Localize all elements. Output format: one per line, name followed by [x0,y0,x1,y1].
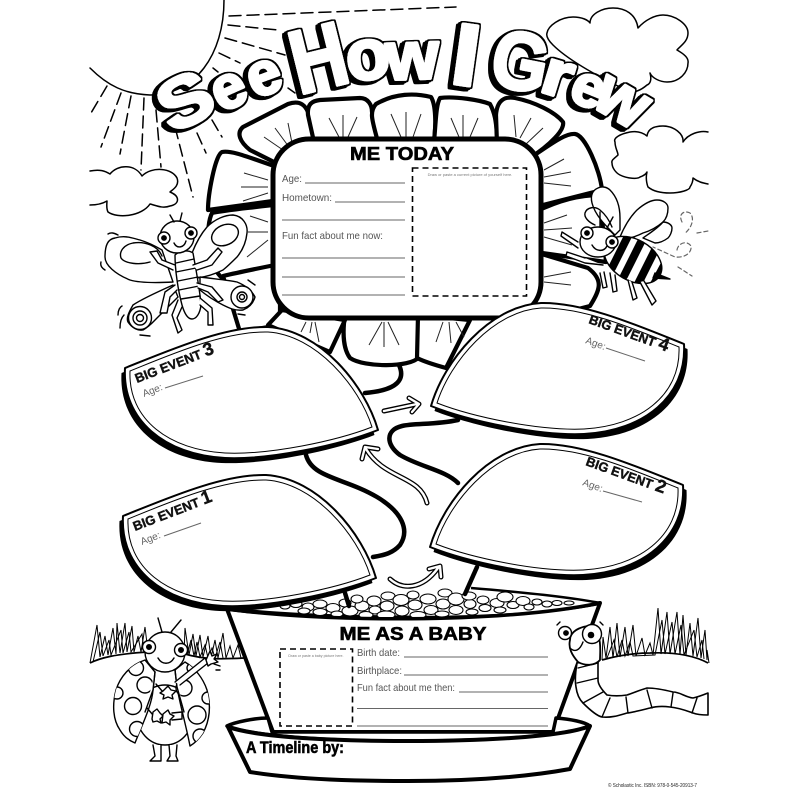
spots [111,660,214,743]
title: I [445,5,487,106]
copyright note: © Scholastic Inc. ISBN: 978-0-545-20913-7 [608,782,697,789]
photo frame: current picture: Draw or paste a current picture of yourself here. [428,172,512,177]
icon: worm [557,622,708,717]
title: H [279,2,358,113]
panel: big event 3: BIG EVENT 3 [131,338,217,387]
title: G [484,12,557,112]
form fields: baby: Birthplace: [357,665,402,677]
title: w [383,17,441,95]
leaf shape [430,444,687,580]
leaf shape [119,475,376,611]
timeline label: A Timeline by: [246,738,344,757]
pot [227,588,600,732]
title: e [236,37,290,111]
form fields: baby [357,647,548,726]
photo frame: baby picture [280,649,352,726]
panel: big event 4 [431,303,688,439]
petal ray lines [241,112,572,347]
soil and pebbles [227,588,600,619]
panel: big event 4: Age: [584,335,607,353]
icon: bee [561,187,708,305]
title: w [582,53,665,143]
icon: top right cloud [547,8,688,92]
title: e [562,51,616,123]
form fields: today: Age: [282,173,302,185]
flower petals [208,95,606,368]
panel: big event 4: BIG EVENT 4 [587,308,672,355]
title: S [143,54,227,147]
arrow: event 3 to event 4 [384,398,419,412]
panel: big event 2: BIG EVENT 2 [584,450,669,497]
icon: sun with dashed rays [90,0,456,197]
title: o [341,13,394,97]
title: e [199,50,257,125]
panel: big event 3: Age: [141,382,164,400]
title: r [534,35,583,112]
form fields: baby: Fun fact about me then: [357,682,455,694]
photo frame: baby picture: Draw or paste a baby picture here. [288,654,344,658]
panel: big event 2: Age: [581,477,604,495]
panel: big event 1: BIG EVENT 1 [129,486,215,535]
heading: me today: ME TODAY [350,144,454,164]
leaf shape [121,327,378,463]
panel: big event 1: Age: [139,530,162,548]
icon: right cloud [612,126,708,193]
icon: butterfly [101,213,255,336]
panel: big event 1 [119,475,376,611]
arrow: event 2 to event 3 [362,447,427,503]
icon: left cloud [90,167,178,216]
heading: me as a baby: ME AS A BABY [340,624,486,644]
form fields: today [282,173,405,295]
form fields: today: Fun fact about me now: [282,230,383,242]
form fields: baby: Birth date: [357,647,400,659]
title [143,2,665,147]
pot saucer [227,718,590,781]
icon: right grass [602,608,709,663]
panel: big event 2 [430,444,687,580]
plant stems [306,365,477,606]
form fields: today: Hometown: [282,192,332,204]
icon: left grass [90,623,244,663]
leaf shape [431,303,688,439]
arrow: event 1 to event 2 [390,566,441,586]
panel: me today [273,139,541,318]
icon: ladybug [111,618,220,761]
photo frame: current picture [412,168,526,296]
panel: big event 3 [121,327,378,463]
